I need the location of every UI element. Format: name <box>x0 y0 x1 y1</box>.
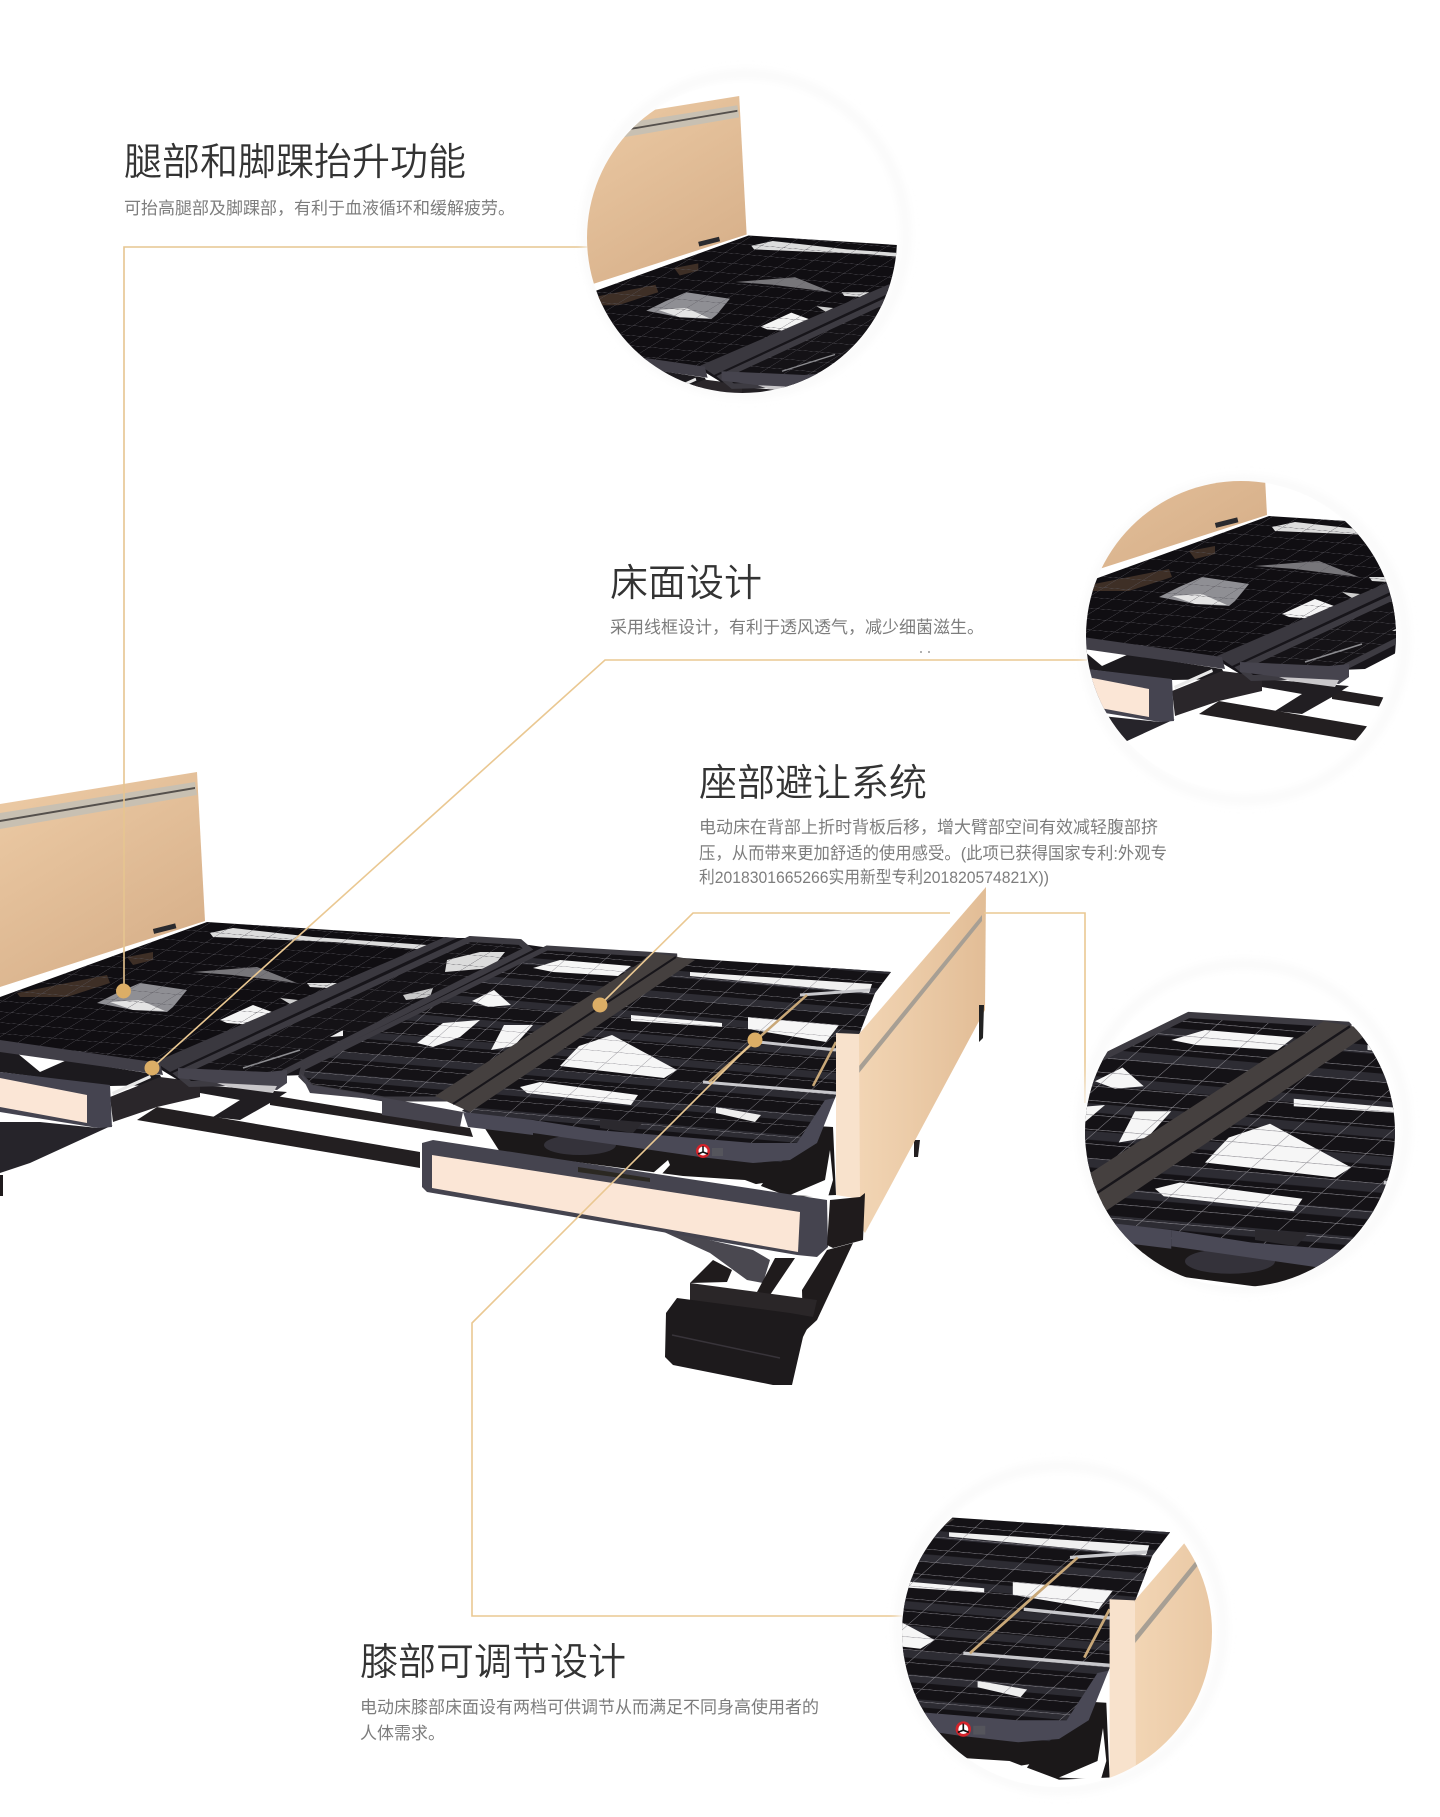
side cover <box>422 1140 828 1257</box>
text: knee adjustment description: 人体需求。 <box>360 1724 445 1743</box>
text: seat avoidance description: 压，从而带来更加舒适的使用感受。(此项已获得国家专利:外观专 <box>699 843 1167 863</box>
callout line: seat avoidance <box>592 913 1085 1103</box>
heading: seat avoidance system: 座部避让系统 <box>699 763 927 805</box>
heading: leg and ankle lift: 腿部和脚踝抬升功能 <box>124 142 466 184</box>
heading: knee adjustment design: 膝部可调节设计 <box>360 1642 626 1684</box>
detail circle: knee section <box>892 1518 1212 1780</box>
text: bed surface description: 采用线框设计，有利于透风透气，减少细菌滋生。 <box>610 618 984 637</box>
text: seat avoidance description <box>699 818 1167 887</box>
callout line: leg and ankle lift <box>116 247 590 998</box>
detail circle: wire bed surface <box>1078 481 1396 741</box>
heading: bed surface design: 床面设计 <box>610 563 762 605</box>
detail circle: headboard and back section <box>578 96 897 393</box>
text: leg and ankle lift description: 可抬高腿部及脚踝部，有利于血液循环和缓解疲劳。 <box>124 199 515 218</box>
text: knee adjustment description: 电动床膝部床面设有两档可供调节从而满足不同身高使用者的 <box>360 1697 819 1717</box>
callout line: knee adjustment <box>472 1032 902 1616</box>
callout line: bed surface <box>144 660 1087 1076</box>
footboard base <box>827 1193 883 1248</box>
bed base rails <box>137 1095 920 1168</box>
text: seat avoidance description: 利2018301665266实用新型专利201820574821X)) <box>699 868 1049 887</box>
text: knee adjustment description <box>360 1697 819 1743</box>
footboard <box>836 887 986 1200</box>
main bed illustration <box>0 772 986 1385</box>
detail circle: seat section <box>1084 1012 1395 1286</box>
bed leg assembly <box>653 1227 853 1385</box>
text: seat avoidance description: 电动床在背部上折时背板后移，增大臂部空间有效减轻腹部挤 <box>699 818 1158 837</box>
bed foot end and seat decks <box>300 948 891 1197</box>
small dots <box>920 651 930 653</box>
bed head end and back deck <box>0 772 550 1196</box>
